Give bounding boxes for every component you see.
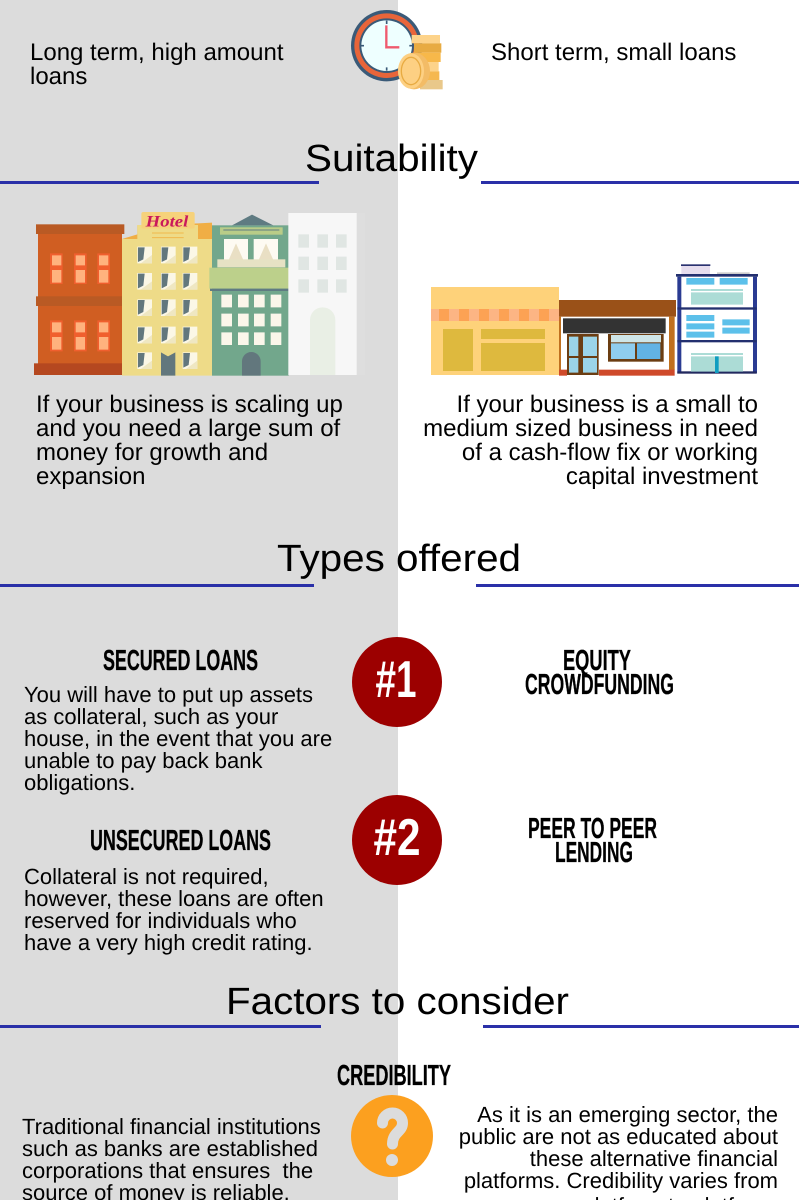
text: suitability left: money for growth and [36, 439, 268, 466]
divider right: types [476, 584, 799, 587]
title: peer to peer lending [528, 813, 657, 869]
brown shop [559, 300, 676, 376]
text: unsecured loans description [24, 864, 324, 955]
divider right: factors [483, 1025, 799, 1028]
text: credibility right [459, 1102, 778, 1200]
title: peer to peer lending: PEER TO PEER [528, 813, 657, 845]
text: secured loans description [24, 682, 332, 795]
text: credibility left [22, 1114, 321, 1200]
text: secured loans description: obligations. [24, 770, 135, 795]
heading: factors to consider: Factors to consider [226, 981, 569, 1023]
text: short term loans: Short term, small loans [491, 39, 736, 66]
text: unsecured loans description: Collateral is not required, [24, 864, 269, 889]
title: equity crowdfunding: CROWDFUNDING [525, 669, 674, 701]
divider right: suitability [481, 181, 799, 184]
text: credibility left: Traditional financial institutions [22, 1114, 321, 1139]
hotel sign text: Hotel [145, 213, 189, 230]
text: suitability left: If your business is scaling up [36, 391, 343, 418]
text: suitability right: medium sized business in need [423, 415, 758, 442]
text: suitability right: capital investment [566, 463, 758, 490]
yellow shop [431, 287, 559, 375]
text: suitability right: of a cash-flow fix or working [462, 439, 758, 466]
text: credibility left: corporations that ensures the [22, 1158, 313, 1183]
orange building [34, 224, 124, 375]
title: unsecured loans: UNSECURED LOANS [90, 825, 271, 857]
text: suitability left: expansion [36, 463, 145, 490]
text: long term loans [30, 39, 284, 90]
badge: number 2 [352, 795, 442, 885]
text: credibility left: such as banks are established [22, 1136, 318, 1161]
icon: question mark [351, 1095, 433, 1177]
title: secured loans: SECURED LOANS [103, 645, 258, 677]
divider left: factors [0, 1025, 321, 1028]
blue office building [676, 264, 758, 374]
text: suitability right [423, 391, 758, 490]
illustration: large buildings [34, 212, 365, 376]
title: peer to peer lending: LENDING [555, 837, 633, 869]
text: unsecured loans description: however, these loans are often [24, 886, 324, 911]
text: secured loans description: You will have to put up assets [24, 682, 313, 707]
text: suitability right: If your business is a small to [457, 391, 758, 418]
badge: number 2: #2 [374, 809, 420, 867]
title: equity crowdfunding [525, 645, 674, 701]
divider left: types [0, 584, 314, 587]
illustration: small buildings [431, 264, 758, 376]
text: credibility right: public are not as educated about [459, 1124, 778, 1149]
hotel building [122, 212, 212, 376]
text: credibility right: platforms. Credibility varies from [464, 1168, 778, 1193]
text: suitability left [36, 391, 343, 490]
text: credibility right: these alternative financial [530, 1146, 778, 1171]
badge: number 1 [352, 637, 442, 727]
text: long term loans: Long term, high amount [30, 39, 284, 66]
divider left: suitability [0, 181, 319, 184]
heading: suitability: Suitability [305, 138, 478, 180]
text: long term loans: loans [30, 63, 87, 90]
text: unsecured loans description: have a very high credit rating. [24, 930, 313, 955]
text: secured loans description: house, in the event that you are [24, 726, 332, 751]
badge: number 1: #1 [376, 651, 416, 709]
green building [209, 215, 289, 376]
text: unsecured loans description: reserved for individuals who [24, 908, 297, 933]
icon: clock and coins [351, 10, 443, 89]
text: secured loans description: unable to pay back bank [24, 748, 264, 773]
white building [288, 213, 365, 375]
title: credibility: CREDIBILITY [337, 1060, 451, 1092]
text: suitability left: and you need a large sum of [36, 415, 341, 442]
title: equity crowdfunding: EQUITY [563, 645, 631, 677]
text: credibility right: As it is an emerging sector, the [477, 1102, 778, 1127]
text: secured loans description: as collateral, such as your [24, 704, 278, 729]
heading: types offered: Types offered [277, 538, 521, 580]
